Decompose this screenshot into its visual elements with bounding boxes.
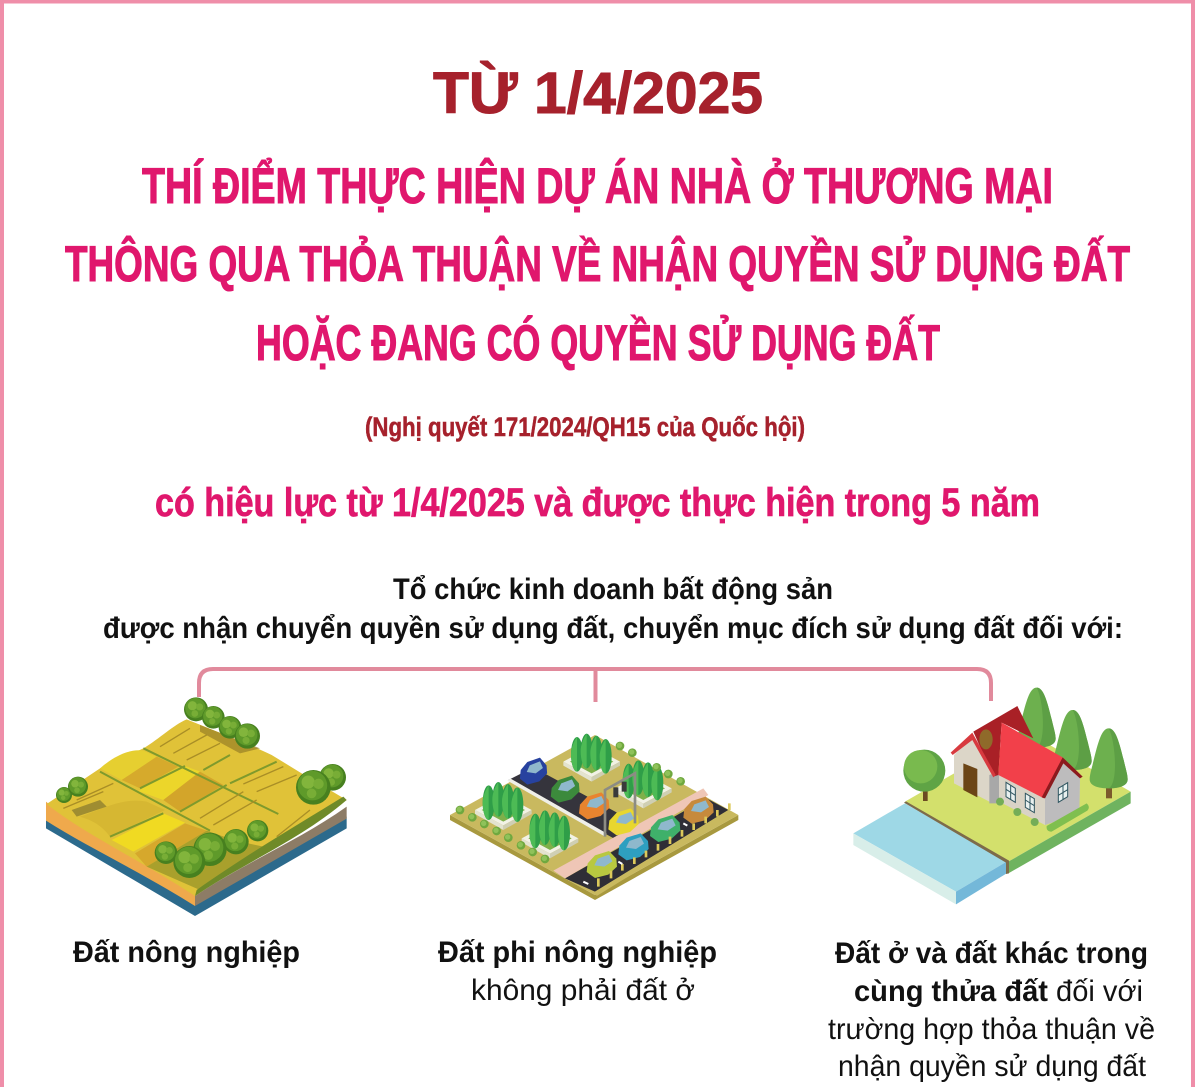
label: non-agricultural land [438,936,717,1007]
icon: house by water [853,688,1131,904]
label: residential and other land: nhận quyền sử dụng đất [838,1050,1147,1083]
label: residential and other land: trường hợp thỏa thuận về [828,1013,1155,1046]
intro text: Tổ chức kinh doanh bất động sản [393,573,833,606]
label: residential and other land: Đất ở và đất khác trong [835,937,1148,970]
label: non-agricultural land: Đất phi nông nghiệp [438,936,717,969]
label: residential and other land [828,937,1155,1083]
legal reference: (Nghị quyết 171/2024/QH15 của Quốc hội) [365,412,805,442]
intro text: được nhận chuyển quyền sử dụng đất, chuyển mục đích sử dụng đất đối với: [103,612,1123,645]
label: residential and other land: cùng thửa đất đối với [854,975,1143,1008]
icon: agricultural land [46,697,347,916]
heading line 3: HOẶC ĐANG CÓ QUYỀN SỬ DỤNG ĐẤT [256,314,940,371]
icon: non-agricultural land [450,734,738,900]
label: agricultural land: Đất nông nghiệp [73,936,300,969]
effective date note: có hiệu lực từ 1/4/2025 và được thực hiện trong 5 năm [155,481,1040,525]
heading: date: TỪ 1/4/2025 [433,61,763,126]
title block [65,61,1130,371]
intro text [103,573,1123,645]
connector bracket [199,669,991,702]
label: non-agricultural land: không phải đất ở [471,974,695,1007]
